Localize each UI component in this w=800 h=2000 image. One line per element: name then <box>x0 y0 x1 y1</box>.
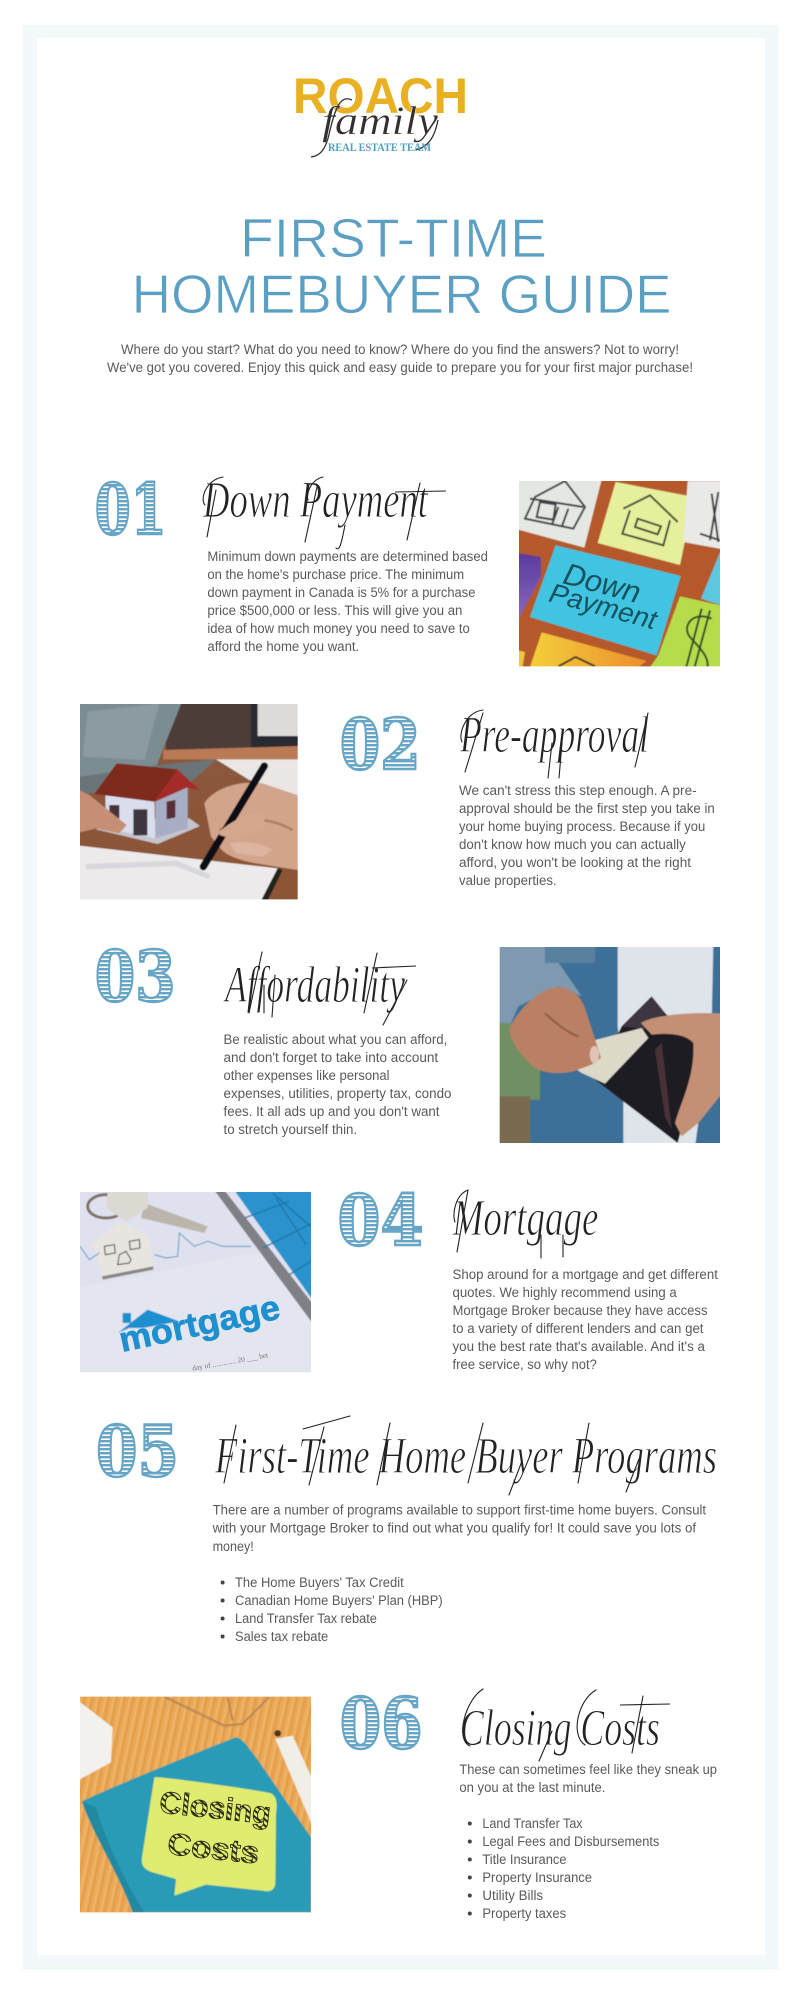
heading: First-Time Home Buyer Programs <box>214 1416 717 1495</box>
body text <box>212 1503 706 1554</box>
body text: value properties. <box>459 873 557 888</box>
body text: and don't forget to take into account <box>224 1050 438 1065</box>
body text <box>224 1032 452 1137</box>
photo: closing costs note on notebook <box>80 1696 311 1912</box>
closing costs list: Utility Bills <box>482 1888 543 1903</box>
closing costs lettering: Closing <box>158 1785 273 1831</box>
body text: other expenses like personal <box>224 1068 390 1083</box>
number 06: 06 <box>340 1682 423 1765</box>
body text: Mortgage Broker because they have access <box>452 1303 708 1318</box>
body text: Be realistic about what you can afford, <box>224 1032 447 1047</box>
heading: Down Payment: Down Payment <box>202 472 429 529</box>
body text: There are a number of programs available to support first-time home buyers. Consult <box>213 1503 706 1518</box>
title: HOMEBUYER GUIDE <box>132 263 672 325</box>
closing costs list: Title Insurance <box>482 1852 566 1867</box>
body text: quotes. We highly recommend using a <box>452 1285 677 1300</box>
logo: Roach Family Real Estate Team <box>293 68 468 157</box>
heading: Closing Costs <box>460 1689 670 1761</box>
photo: down payment sticky notes <box>519 481 720 666</box>
mortgage lettering: mortgage <box>116 1289 283 1360</box>
body text: free service, so why not? <box>452 1357 597 1372</box>
body text: your home buying process. Because if you <box>459 819 705 834</box>
body text <box>452 1267 718 1372</box>
number 04: 04 <box>338 1179 424 1262</box>
body text <box>459 1762 717 1795</box>
heading: Mortgage: Mortgage <box>452 1190 598 1247</box>
photo: signing with model house <box>80 704 298 900</box>
closing costs lettering <box>160 1792 270 1864</box>
title <box>132 207 672 325</box>
logo: Roach Family Real Estate Team: family <box>322 98 438 143</box>
body text: Minimum down payments are determined based <box>207 549 488 564</box>
intro text: We've got you covered. Enjoy this quick and easy guide to prepare you for your first major purchase! <box>107 360 693 375</box>
section 06: closing costs <box>76 1682 717 1921</box>
logo: Roach Family Real Estate Team: REAL ESTATE TEAM <box>328 140 431 154</box>
body text: to stretch yourself thin. <box>224 1122 357 1137</box>
sticky note lettering: Payment <box>546 577 662 636</box>
sticky note lettering: Down <box>560 557 644 610</box>
heading: Down Payment <box>202 472 446 549</box>
program list: Sales tax rebate <box>235 1629 328 1644</box>
program list: The Home Buyers' Tax Credit <box>235 1575 404 1590</box>
section 04: mortgage <box>76 1179 718 1376</box>
heading: Mortgage <box>452 1190 598 1258</box>
body text: We can't stress this step enough. A pre- <box>459 783 697 798</box>
body text <box>459 783 715 888</box>
number 05: 05 <box>96 1410 179 1493</box>
body text: These can sometimes feel like they sneak up <box>459 1762 717 1777</box>
body text: with your Mortgage Broker to find out what you qualify for! It could save you lots of <box>212 1521 696 1536</box>
section 01: down payment <box>95 468 725 672</box>
body text: afford, you won't be looking at the right <box>459 855 691 870</box>
closing costs lettering: Costs <box>166 1827 261 1871</box>
section 05: first-time home buyer programs <box>96 1410 717 1644</box>
heading: Affordability <box>223 952 416 1025</box>
body text: expenses, utilities, property tax, condo <box>224 1086 452 1101</box>
heading: Pre-approval: Pre-approval <box>459 707 649 764</box>
body text: to a variety of different lenders and can get <box>452 1321 704 1336</box>
closing costs list: Property taxes <box>482 1906 566 1921</box>
photo: mortgage document with keys <box>80 1192 311 1372</box>
logo: Roach Family Real Estate Team: ROACH <box>293 68 468 124</box>
program list: Canadian Home Buyers' Plan (HBP) <box>235 1593 443 1608</box>
body text: down payment in Canada is 5% for a purchase <box>207 585 475 600</box>
intro text: Where do you start? What do you need to know? Where do you find the answers? Not to worry! <box>121 342 679 357</box>
title: FIRST-TIME <box>240 207 547 269</box>
body text: Shop around for a mortgage and get different <box>452 1267 718 1282</box>
body text: afford the home you want. <box>207 639 359 654</box>
number 03: 03 <box>95 935 176 1018</box>
body text: fees. It all ads up and you don't want <box>224 1104 440 1119</box>
body text: you the best rate that's available. And it's a <box>452 1339 705 1354</box>
heading: Pre-approval <box>459 707 649 778</box>
photo: hands and wallet <box>500 947 720 1143</box>
body text: price $500,000 or less. This will give you an <box>207 603 462 618</box>
number 01: 01 <box>95 468 167 551</box>
program list <box>221 1575 443 1644</box>
closing costs list: Land Transfer Tax <box>482 1816 583 1831</box>
closing costs list <box>468 1816 660 1921</box>
program list: Land Transfer Tax rebate <box>235 1611 377 1626</box>
body text: idea of how much money you need to save to <box>207 621 470 636</box>
body text: don't know how much you can actually <box>459 837 686 852</box>
heading: Affordability: Affordability <box>223 957 406 1014</box>
closing costs list: Legal Fees and Disbursements <box>482 1834 660 1849</box>
body text: approval should be the first step you take in <box>459 801 715 816</box>
number 02: 02 <box>340 703 421 786</box>
body text: on you at the last minute. <box>459 1780 605 1795</box>
body text <box>207 549 488 654</box>
section 02: pre-approval <box>76 700 715 904</box>
heading: Closing Costs: Closing Costs <box>460 1700 660 1757</box>
section 03: affordability <box>95 935 725 1147</box>
body text: money! <box>213 1539 254 1554</box>
closing costs list: Property Insurance <box>482 1870 592 1885</box>
body text: on the home's purchase price. The minimum <box>207 567 464 582</box>
intro text <box>107 342 693 375</box>
photo: mortgage document with keys: day of ............. 20 ___ bet <box>191 1350 269 1373</box>
